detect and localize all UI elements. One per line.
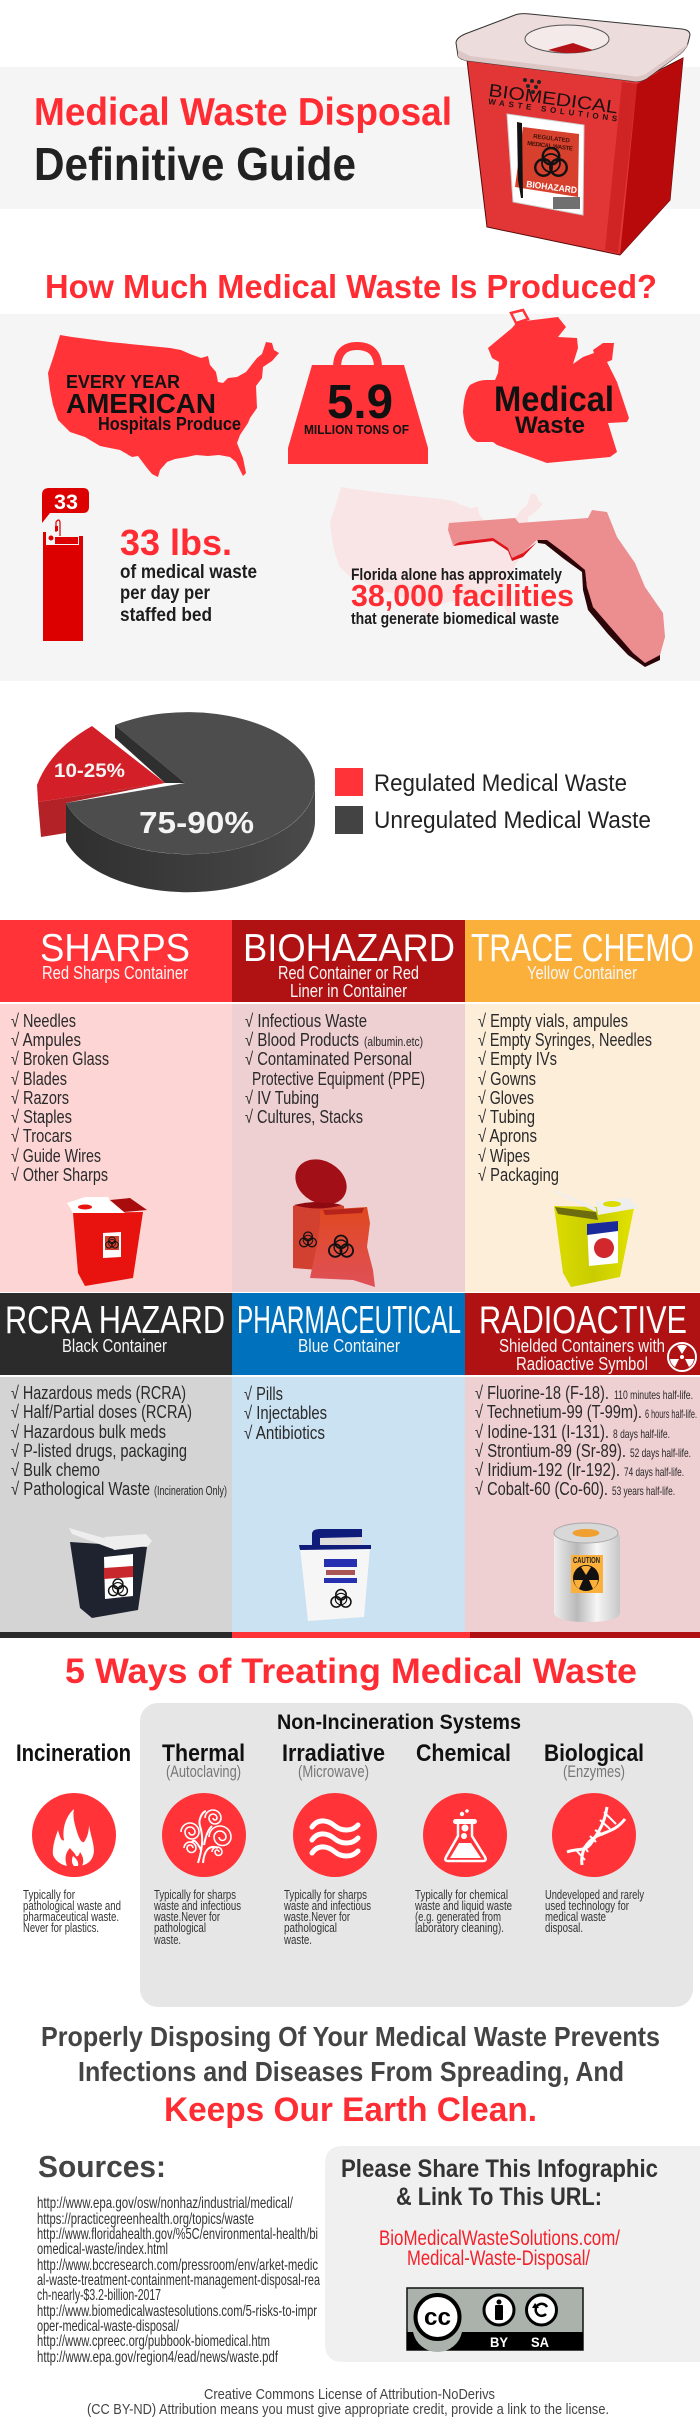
biohazard list: √ Contaminated Personal bbox=[245, 1049, 412, 1069]
treatment: biological: (Enzymes) bbox=[563, 1762, 625, 1781]
treatment: irradiative: Irradiative bbox=[282, 1740, 385, 1767]
thermal note bbox=[153, 1887, 241, 1947]
radioactive list: √ Strontium-89 (Sr-89). bbox=[475, 1441, 626, 1461]
radioactive list: √ Iridium-192 (Ir-192). bbox=[475, 1460, 620, 1480]
treatment: chemical: Chemical bbox=[416, 1740, 511, 1767]
source links: al-waste-treatment-containment-management-disposal-rea bbox=[37, 2272, 320, 2289]
pharmaceutical list: √ Pills bbox=[244, 1384, 283, 1404]
thermal note: waste.Never for bbox=[153, 1909, 220, 1924]
waste bag icon: Waste bbox=[515, 412, 585, 439]
panel: rcra hazard: Black Container bbox=[62, 1335, 167, 1356]
weight icon: 5.9 bbox=[327, 376, 393, 429]
panel: share: Please Share This Infographic bbox=[341, 2155, 658, 2183]
sharps list: √ Broken Glass bbox=[11, 1049, 109, 1069]
rcra list bbox=[11, 1383, 227, 1499]
panel: radioactive: Shielded Containers with bbox=[499, 1335, 665, 1356]
panel: rcra hazard bbox=[0, 1293, 232, 1632]
biohazard list: √ Cultures, Stacks bbox=[245, 1107, 363, 1127]
panel: share: & Link To This URL: bbox=[396, 2183, 602, 2211]
incineration note: Typically for bbox=[23, 1887, 76, 1902]
panel: sharps: SHARPS bbox=[40, 927, 190, 970]
treatment: incineration: Incineration bbox=[16, 1740, 131, 1767]
rcra list: (Incineration Only) bbox=[154, 1483, 227, 1498]
treatment: thermal bbox=[153, 1740, 246, 1947]
rcra list: √ Bulk chemo bbox=[11, 1460, 100, 1480]
sharps list: √ Staples bbox=[11, 1107, 72, 1127]
biological note: used technology for bbox=[545, 1898, 629, 1913]
panel: non-incineration systems bbox=[140, 1703, 693, 2007]
source links: http://www.bccresearch.com/pressroom/env/arket-medic bbox=[37, 2257, 318, 2274]
biological note: disposal. bbox=[545, 1920, 583, 1935]
source links bbox=[37, 2195, 320, 2366]
treatment: chemical bbox=[414, 1740, 512, 1935]
33 lbs text: per day per bbox=[120, 583, 211, 604]
irradiative note: waste. bbox=[283, 1932, 312, 1947]
closing statement: Keeps Our Earth Clean. bbox=[164, 2091, 537, 2129]
biohazard list: √ Blood Products bbox=[245, 1030, 359, 1050]
source links: http://www.biomedicalwastesolutions.com/5-risks-to-impr bbox=[37, 2303, 317, 2320]
panel: trace chemo bbox=[465, 920, 700, 1292]
brand logo: WASTE SOLUTIONS bbox=[488, 97, 618, 123]
panel: radioactive: Radioactive Symbol bbox=[516, 1353, 648, 1374]
source links: http://www.cpreec.org/pubbook-biomedical.htm bbox=[37, 2333, 270, 2350]
rcra list: √ P-listed drugs, packaging bbox=[11, 1441, 187, 1461]
irradiative note: waste and infectious bbox=[283, 1898, 371, 1913]
Florida text: Florida alone has approximately bbox=[351, 565, 562, 584]
coast shadow bbox=[537, 537, 660, 667]
panel: radioactive bbox=[465, 1293, 700, 1632]
treatment: incineration bbox=[16, 1740, 131, 1935]
trace chemo list: √ Wipes bbox=[478, 1146, 530, 1166]
label bbox=[507, 114, 584, 215]
radioactive list: √ Iodine-131 (I-131). bbox=[475, 1422, 609, 1442]
Florida text bbox=[351, 565, 574, 628]
license footer: Creative Commons License of Attribution-NoDerivs bbox=[204, 2386, 495, 2403]
icon: flask bbox=[445, 1809, 486, 1861]
CC BY-SA badge bbox=[407, 2288, 583, 2352]
dark slice extrusion bbox=[66, 783, 315, 892]
pharmaceutical list bbox=[244, 1384, 327, 1443]
33 lbs text: of medical waste bbox=[120, 562, 257, 583]
brand logo: BIOMEDICAL bbox=[487, 80, 619, 117]
trace chemo list: √ Empty vials, ampules bbox=[478, 1011, 628, 1031]
trace chemo list: √ Empty IVs bbox=[478, 1049, 557, 1069]
panel: rcra hazard: RCRA HAZARD bbox=[5, 1299, 225, 1342]
source links: http://www.floridahealth.gov/%5C/environmental-health/bi bbox=[37, 2226, 318, 2243]
panel: non-incineration systems: Non-Incineration Systems bbox=[277, 1711, 521, 1734]
red slice side bbox=[38, 783, 165, 837]
sharps list: √ Other Sharps bbox=[11, 1165, 108, 1185]
treatment: biological bbox=[544, 1740, 644, 1935]
license footer bbox=[87, 2386, 609, 2418]
icon: red sharps container: REGULATED bbox=[533, 134, 571, 145]
US map: EVERY YEAR bbox=[66, 372, 180, 392]
panel: biohazard: BIOHAZARD bbox=[243, 927, 455, 970]
thermal note: waste and infectious bbox=[153, 1898, 241, 1913]
pie chart: 10-25% bbox=[54, 761, 125, 782]
bed stat bar: 33 bbox=[54, 491, 78, 514]
dark slice top bbox=[66, 712, 315, 854]
incineration note: pharmaceutical waste. bbox=[23, 1909, 119, 1924]
pie legend bbox=[335, 768, 651, 834]
biological note: Undeveloped and rarely bbox=[545, 1887, 644, 1902]
weight icon bbox=[288, 346, 428, 464]
incineration note: Never for plastics. bbox=[23, 1920, 99, 1935]
US map: AMERICAN bbox=[66, 388, 216, 419]
icon: red sharps container: MEDICAL WASTE bbox=[527, 141, 573, 153]
brand logo bbox=[487, 78, 619, 123]
chemical note: Typically for chemical bbox=[415, 1887, 508, 1902]
trace chemo list: √ Packaging bbox=[478, 1165, 559, 1185]
pie legend: Regulated Medical Waste bbox=[374, 770, 627, 797]
panel: sharps: Red Sharps Container bbox=[42, 962, 188, 983]
panel: production stats bbox=[0, 310, 700, 681]
icon: red sharps bin bbox=[67, 1197, 147, 1286]
chemical note: waste and liquid waste bbox=[414, 1898, 512, 1913]
radioactive list: √ Cobalt-60 (Co-60). bbox=[475, 1479, 608, 1499]
sharps list: √ Guide Wires bbox=[11, 1146, 101, 1166]
treatment: thermal: Thermal bbox=[162, 1740, 245, 1767]
sharps list: √ Razors bbox=[11, 1088, 69, 1108]
irradiative note: Typically for sharps bbox=[284, 1887, 367, 1902]
icon: yellow bin bbox=[554, 1190, 638, 1287]
icon: shielded barrel bbox=[554, 1523, 620, 1622]
title line 2: Definitive Guide bbox=[34, 138, 356, 190]
irradiative note bbox=[283, 1887, 371, 1947]
pie legend: Unregulated Medical Waste bbox=[374, 807, 651, 834]
closing statement bbox=[41, 2021, 660, 2129]
panel: share bbox=[325, 2146, 700, 2362]
pharmaceutical list: √ Antibiotics bbox=[244, 1423, 325, 1443]
sharps list: √ Trocars bbox=[11, 1126, 72, 1146]
irradiative note: waste.Never for bbox=[283, 1909, 350, 1924]
panel: pharmaceutical: Blue Container bbox=[298, 1335, 400, 1356]
trace chemo list bbox=[478, 1011, 652, 1185]
incineration note bbox=[23, 1887, 121, 1935]
US map bbox=[48, 335, 279, 477]
biohazard list bbox=[245, 1011, 425, 1127]
CC BY-SA badge: cc bbox=[424, 2304, 451, 2331]
sources: Sources: bbox=[38, 2149, 166, 2184]
treatment: irradiative bbox=[282, 1740, 385, 1947]
pie chart bbox=[37, 712, 315, 892]
panel: biohazard: Red Container or Red bbox=[278, 962, 419, 983]
radioactive list: √ Technetium-99 (T-99m). bbox=[475, 1402, 642, 1422]
incineration note: pathological waste and bbox=[23, 1898, 121, 1913]
closing statement: Infections and Diseases From Spreading, And bbox=[78, 2056, 624, 2087]
sharps list: √ Needles bbox=[11, 1011, 76, 1031]
sharps list: √ Blades bbox=[11, 1069, 67, 1089]
title line 1: Medical Waste Disposal bbox=[34, 91, 452, 134]
thermal note: waste. bbox=[153, 1932, 181, 1947]
icon: red sharps container: BIOHAZARD bbox=[526, 179, 578, 195]
biohazard list: (albumin.etc) bbox=[364, 1034, 423, 1049]
CC BY-SA badge: BY bbox=[490, 2334, 509, 2350]
CC BY-SA badge: SA bbox=[531, 2334, 549, 2350]
icon: red sharps container bbox=[456, 14, 690, 255]
33 lbs text: 33 lbs. bbox=[120, 522, 232, 563]
panel: sharps bbox=[0, 920, 232, 1292]
Florida text: 38,000 facilities bbox=[351, 578, 574, 613]
pie chart: 75-90% bbox=[139, 805, 254, 840]
icon: steam tree bbox=[181, 1810, 231, 1863]
panel: share: Medical-Waste-Disposal/ bbox=[407, 2247, 590, 2270]
header band bbox=[0, 67, 700, 209]
icon: waves bbox=[312, 1821, 358, 1856]
radioactive list: √ Fluorine-18 (F-18). bbox=[475, 1383, 609, 1403]
source links: oper-medical-waste-disposal/ bbox=[37, 2318, 179, 2335]
rcra list: √ Half/Partial doses (RCRA) bbox=[11, 1402, 192, 1422]
biological note bbox=[545, 1887, 644, 1935]
icon: white and blue bin bbox=[299, 1529, 371, 1621]
icon: black bin bbox=[69, 1528, 152, 1618]
source links: ch-nearly-$3.2-billion-2017 bbox=[37, 2287, 161, 2304]
waste bag icon: Medical bbox=[494, 380, 614, 419]
biohazard list: √ Infectious Waste bbox=[245, 1011, 367, 1031]
panel: trace chemo: Yellow Container bbox=[527, 962, 637, 983]
treatment: biological: Biological bbox=[544, 1740, 644, 1767]
rcra list: √ Hazardous meds (RCRA) bbox=[11, 1383, 186, 1403]
icon: shielded barrel: CAUTION bbox=[573, 1556, 600, 1565]
radioactive list bbox=[475, 1383, 697, 1499]
icon: red bag and bin bbox=[287, 1150, 375, 1287]
biohazard list: Protective Equipment (PPE) bbox=[252, 1069, 425, 1089]
bed stat bar bbox=[42, 488, 89, 641]
source links: https://practicegreenhealth.org/topics/waste bbox=[37, 2211, 254, 2228]
trace chemo list: √ Gloves bbox=[478, 1088, 534, 1108]
chemical note: (e.g. generated from bbox=[415, 1909, 501, 1924]
panel: pharmaceutical bbox=[232, 1293, 465, 1632]
chemical note: laboratory cleaning). bbox=[415, 1920, 504, 1935]
license footer: (CC BY-ND) Attribution means you must give appropriate credit, provide a link to the license. bbox=[87, 2401, 609, 2418]
panel: biohazard: Liner in Container bbox=[290, 980, 407, 1001]
heading: how much: How Much Medical Waste Is Produced? bbox=[45, 268, 657, 305]
Florida map bbox=[330, 487, 665, 667]
waste bag icon bbox=[463, 310, 629, 463]
icon: DNA helix bbox=[567, 1807, 625, 1865]
treatment: irradiative: (Microwave) bbox=[298, 1762, 369, 1781]
pharmaceutical list: √ Injectables bbox=[244, 1403, 327, 1423]
irradiative note: pathological bbox=[284, 1920, 337, 1935]
red slice bbox=[37, 726, 165, 802]
panel: share: BioMedicalWasteSolutions.com/ bbox=[379, 2227, 620, 2250]
panel: pharmaceutical: PHARMACEUTICAL bbox=[237, 1299, 461, 1342]
US map: Hospitals Produce bbox=[98, 414, 241, 434]
sharps list: √ Ampules bbox=[11, 1030, 81, 1050]
bottom colour strip bbox=[0, 1632, 700, 1638]
treatment: thermal: (Autoclaving) bbox=[166, 1762, 241, 1781]
33 lbs text bbox=[120, 522, 257, 626]
trace chemo list: √ Gowns bbox=[478, 1069, 536, 1089]
icon: radiation symbol bbox=[668, 1343, 696, 1371]
sharps list bbox=[11, 1011, 109, 1185]
thermal note: Typically for sharps bbox=[154, 1887, 236, 1902]
icon: flame bbox=[53, 1809, 94, 1866]
heading: 5 ways: 5 Ways of Treating Medical Waste bbox=[65, 1652, 637, 1691]
source links: http://www.epa.gov/region4/ead/news/waste.pdf bbox=[37, 2349, 278, 2366]
source links: omedical-waste/index.html bbox=[37, 2241, 168, 2258]
thermal note: pathological bbox=[154, 1920, 206, 1935]
source links: http://www.epa.gov/osw/nonhaz/industrial/medical/ bbox=[37, 2195, 293, 2212]
weight icon: MILLION TONS OF bbox=[304, 422, 409, 437]
biological note: medical waste bbox=[545, 1909, 606, 1924]
trace chemo list: √ Aprons bbox=[478, 1126, 537, 1146]
panel: biohazard bbox=[232, 920, 465, 1292]
trace chemo list: √ Empty Syringes, Needles bbox=[478, 1030, 652, 1050]
rcra list: √ Pathological Waste bbox=[11, 1479, 150, 1499]
33 lbs text: staffed bed bbox=[120, 605, 212, 626]
biohazard list: √ IV Tubing bbox=[245, 1088, 319, 1108]
trace chemo list: √ Tubing bbox=[478, 1107, 535, 1127]
radioactive list: 8 days half-life. bbox=[613, 1427, 670, 1441]
rcra list: √ Hazardous bulk meds bbox=[11, 1422, 166, 1442]
sources bbox=[37, 2149, 320, 2366]
chemical note bbox=[414, 1887, 512, 1935]
Florida text: that generate biomedical waste bbox=[351, 609, 559, 628]
lid bbox=[456, 14, 690, 81]
